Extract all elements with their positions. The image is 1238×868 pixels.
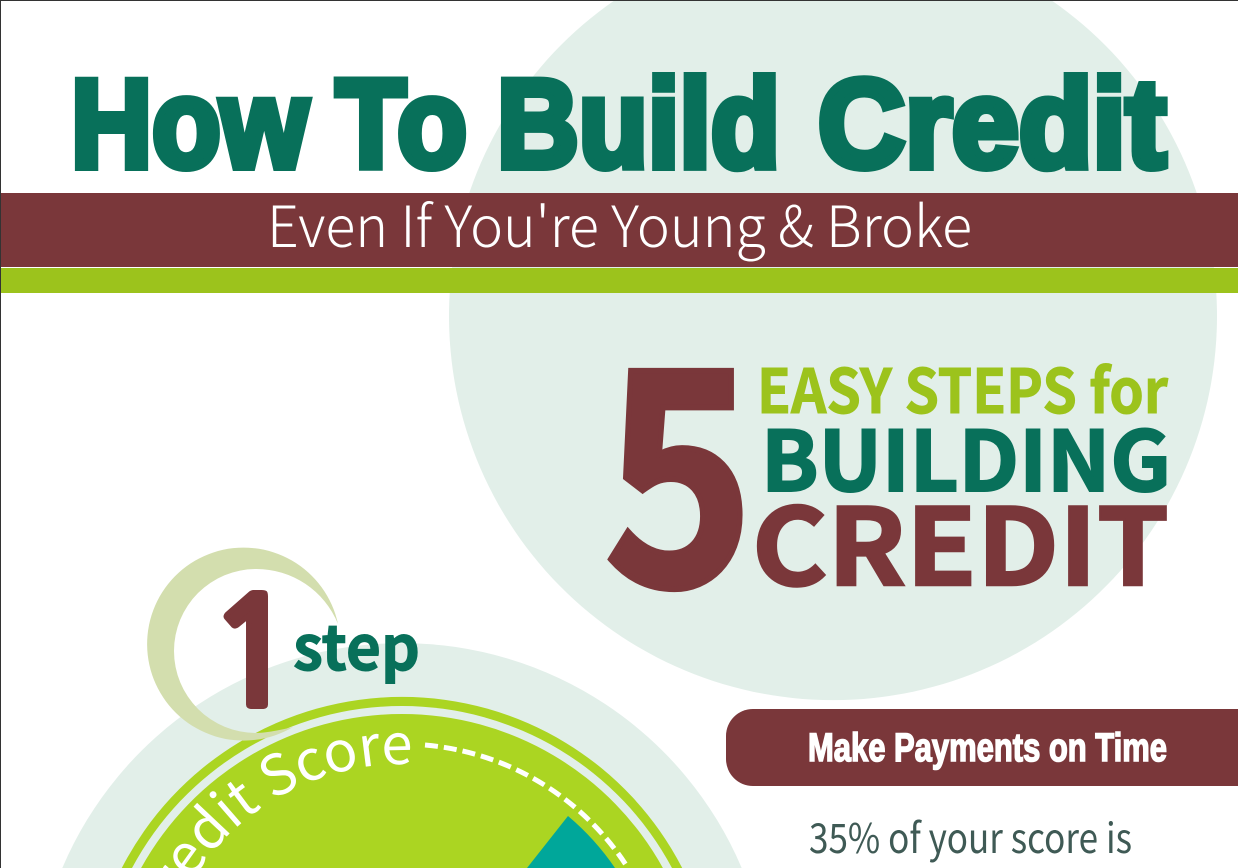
credit: CREDIT: [752, 462, 1169, 616]
step body text: 35% of your score is: [809, 805, 1132, 865]
green banner stripe: [1, 268, 1238, 293]
background circle: step 1: [62, 643, 742, 868]
gauge: credit score: [122, 696, 682, 868]
step 1 badge: [147, 548, 420, 741]
large numeral 5: 5: [604, 240, 754, 671]
gauge dashed arc: [425, 745, 628, 868]
gauge face: [141, 714, 663, 868]
subtitle: Even If You're Young & Broke: [267, 182, 972, 264]
gauge outer ring: [122, 697, 682, 868]
title: Build: [497, 55, 780, 194]
title: Credit: [818, 55, 1166, 194]
building: BUILDING: [761, 395, 1171, 515]
gauge pale ring: [132, 706, 672, 868]
title: [71, 55, 1166, 194]
easy steps for: EASY STEPS for: [757, 342, 1168, 431]
background circle: top right: [449, 0, 1217, 700]
badge crescent: [147, 548, 338, 741]
step label: step: [293, 598, 420, 688]
gauge teal segment: [527, 816, 615, 868]
title: How: [71, 55, 309, 194]
pill background: [726, 709, 1238, 786]
heading: 5 easy steps for building credit: [604, 240, 1171, 671]
maroon banner: [1, 193, 1238, 267]
step heading pill: [726, 709, 1238, 786]
title: To: [336, 55, 467, 194]
numeral 1: 1: [206, 581, 301, 729]
